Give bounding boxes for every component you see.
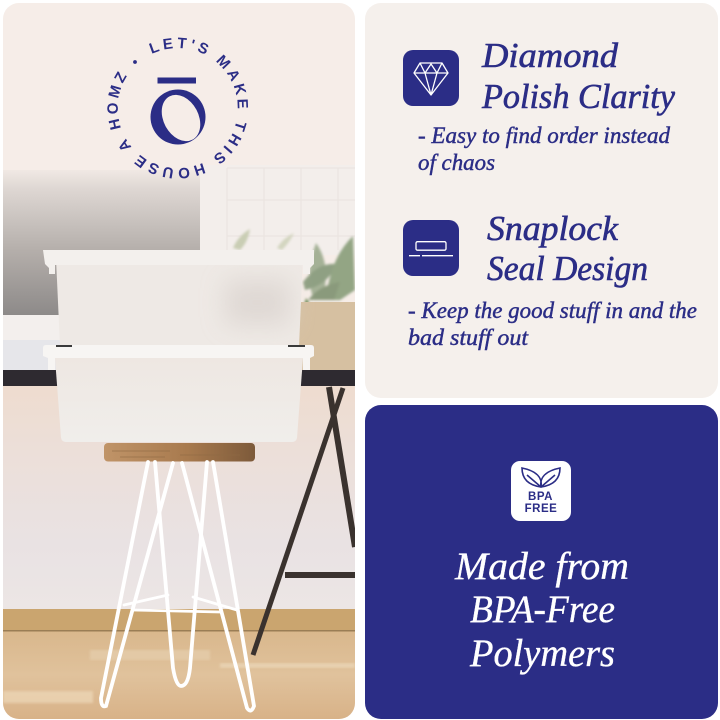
text: seal description: - Keep the good stuff in and the (408, 298, 697, 323)
baseboard (3, 609, 355, 631)
upper box (43, 250, 314, 346)
logo mark (150, 78, 208, 148)
lower box (43, 345, 314, 442)
heading: snaplock seal design: Snaplock (487, 209, 619, 248)
panel: product photo (3, 3, 355, 719)
plant (232, 229, 355, 302)
icon: BPA free leaves: FREE (525, 503, 557, 515)
heading: diamond polish clarity (481, 36, 675, 116)
stool seat (104, 443, 255, 462)
icon: BPA free leaves (511, 461, 571, 521)
text: clarity description: - Easy to find order instead (418, 123, 671, 148)
heading: made from BPA-free polymers: BPA-Free (470, 588, 615, 631)
monitor (3, 170, 200, 315)
logo badge (107, 38, 248, 178)
icon: snaplock seal (403, 220, 459, 276)
icon: BPA free leaves: BPA (528, 491, 553, 503)
heading: snaplock seal design (487, 209, 648, 288)
heading: made from BPA-free polymers (454, 545, 629, 675)
text: clarity description (418, 123, 671, 175)
stool hairpin legs (101, 462, 254, 711)
plant pot (299, 302, 355, 370)
heading: diamond polish clarity: Diamond (481, 36, 619, 75)
icon: diamond (403, 50, 459, 106)
monitor base (3, 340, 60, 370)
wall tiles (226, 168, 355, 250)
heading: diamond polish clarity: Polish Clarity (481, 77, 675, 116)
desk trestle legs (253, 387, 355, 655)
heading: made from BPA-free polymers: Made from (454, 545, 629, 588)
text: seal description: bad stuff out (408, 325, 529, 350)
panel: BPA free (365, 405, 718, 719)
heading: made from BPA-free polymers: Polymers (469, 632, 615, 675)
floor (3, 630, 355, 719)
slogan dot (133, 60, 137, 64)
stacked storage boxes (43, 250, 314, 442)
text: seal description (408, 298, 697, 350)
panel: features (365, 3, 718, 398)
desk (3, 370, 355, 386)
circular slogan: LET'S MAKE THIS HOUSE A HOMZ (107, 38, 248, 178)
wall below desk (3, 386, 355, 610)
heading: snaplock seal design: Seal Design (487, 249, 648, 288)
text: clarity description: of chaos (418, 150, 495, 175)
